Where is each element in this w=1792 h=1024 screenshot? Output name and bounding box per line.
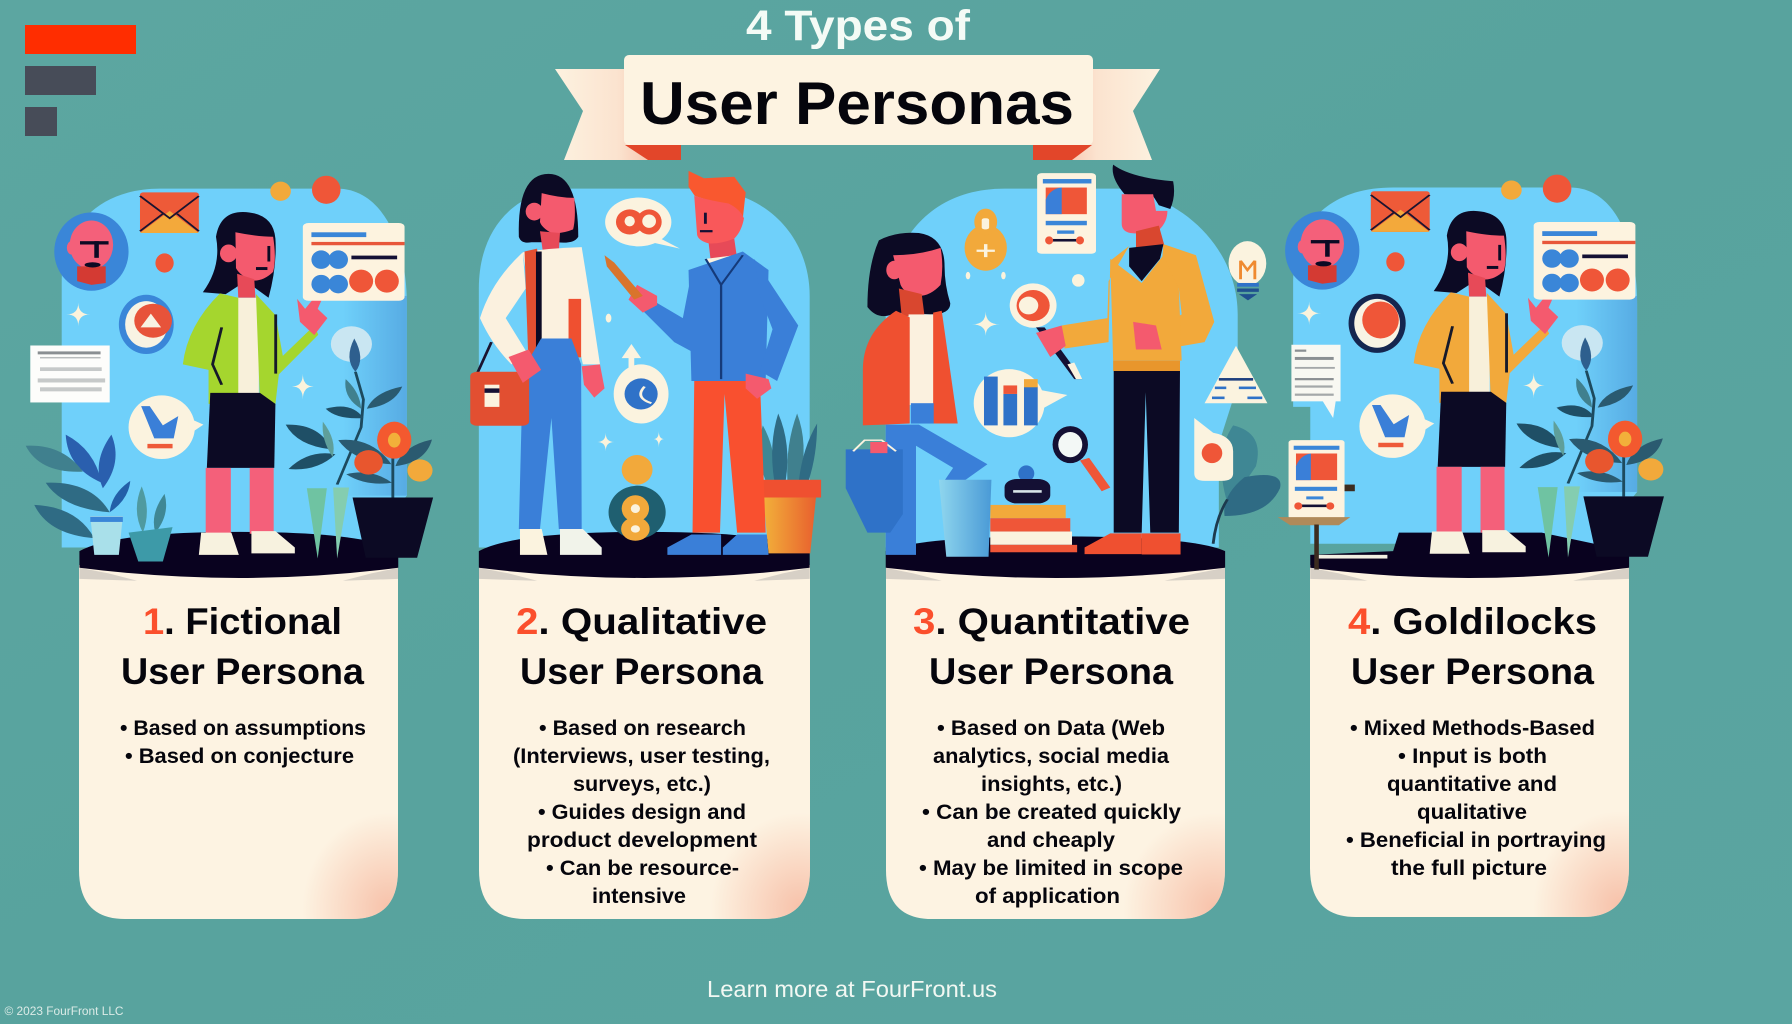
data note bubble xyxy=(1291,345,1341,418)
UI card xyxy=(303,223,405,301)
platform xyxy=(479,532,810,578)
stacked balls icon xyxy=(609,455,666,541)
UI card xyxy=(1534,222,1635,300)
card 4 bullets: • Beneficial in portraying xyxy=(1346,829,1606,852)
document card on table xyxy=(1278,440,1387,570)
ribbon left fold xyxy=(625,145,681,160)
card 2 bullets xyxy=(513,717,770,908)
speech bubble with check xyxy=(1359,394,1434,458)
card 3 illustration xyxy=(846,165,1280,581)
stipple corners xyxy=(479,568,810,581)
card 2 bullets: product development xyxy=(527,829,757,852)
card 2 bullets: • Based on research xyxy=(539,717,746,740)
card 3 bullets: • May be limited in scope xyxy=(919,857,1183,880)
card 3 text panel xyxy=(886,565,1225,919)
card 3 bullets xyxy=(919,717,1183,908)
icon: sparkles xyxy=(66,303,314,399)
copyright: © 2023 FourFront LLC xyxy=(4,1004,124,1018)
panel: card 2 Qualitative xyxy=(470,171,821,919)
book stack xyxy=(990,505,1077,552)
card 2 bullets: surveys, etc.) xyxy=(573,773,711,796)
arrow clock icon xyxy=(614,344,669,424)
card 1 bullets xyxy=(120,717,366,768)
card 3 bullets: analytics, social media xyxy=(933,745,1169,768)
card 1 bullets: • Based on conjecture xyxy=(125,745,354,768)
card 3 bullets: of application xyxy=(975,885,1120,908)
amber bubble plus xyxy=(965,209,1007,271)
panel: card 1 Fictional xyxy=(26,176,433,919)
card 2 bullets: (Interviews, user testing, xyxy=(513,745,770,768)
card 4 bullets xyxy=(1346,717,1606,880)
card 2 heading: 2. Qualitative xyxy=(516,601,767,642)
ribbon right tail xyxy=(1033,69,1160,160)
side plant xyxy=(1213,425,1280,544)
card 2 bullets: • Can be resource- xyxy=(546,857,739,880)
card 4 bullets: quantitative and xyxy=(1387,773,1557,796)
card 4 bullets: • Input is both xyxy=(1398,745,1547,768)
card 3 heading: 3. Quantitative xyxy=(913,601,1190,642)
left potted plant xyxy=(26,435,130,555)
sparkles xyxy=(966,272,1085,336)
platform xyxy=(79,532,398,578)
card 4 heading: 4. Goldilocks xyxy=(1348,601,1597,642)
ink bottle xyxy=(1005,465,1050,503)
bar chart bubble xyxy=(974,369,1067,437)
card 3 bullets: insights, etc.) xyxy=(981,773,1122,796)
speech bubble with check xyxy=(129,395,203,459)
card 1 illustration xyxy=(26,176,433,581)
note with red dot xyxy=(1194,418,1233,481)
right flowering plant and pot xyxy=(286,326,433,559)
stipple corners xyxy=(886,568,1225,581)
banner plate xyxy=(624,55,1093,145)
card 4 bullets: qualitative xyxy=(1417,801,1527,824)
card 2 bullets: • Guides design and xyxy=(538,801,746,824)
magnifier target xyxy=(1010,283,1082,379)
title banner xyxy=(555,55,1160,160)
decorative dots xyxy=(155,176,341,273)
icon: avatar xyxy=(54,212,129,291)
speech bubble infinity xyxy=(605,198,680,249)
decorative dots xyxy=(1386,175,1571,272)
panel: card 3 Quantitative: User Persona xyxy=(929,651,1173,692)
panel: card 2 Qualitative: User Persona xyxy=(520,651,763,692)
person: woman with basket xyxy=(846,233,987,555)
logo xyxy=(25,25,136,136)
platform xyxy=(1310,533,1629,578)
card 1 heading: 1. Fictional xyxy=(143,601,342,642)
pyramid xyxy=(1205,346,1267,403)
panel: card 1 Fictional: User Persona xyxy=(121,651,364,692)
person: man in amber jacket xyxy=(1036,165,1214,554)
card 4 illustration xyxy=(1278,175,1664,581)
magnifying glass xyxy=(1053,426,1110,491)
footer link text: Learn more at FourFront.us xyxy=(707,976,997,1002)
ribbon right fold xyxy=(1033,145,1092,160)
person: woman in amber cardigan xyxy=(1414,211,1558,554)
person: man in blue sweater xyxy=(605,171,798,555)
icon: avatar xyxy=(1285,211,1359,290)
icon: sparkles xyxy=(1297,301,1545,398)
card 3 bullets: • Can be created quickly xyxy=(922,801,1181,824)
card 3 bullets: and cheaply xyxy=(987,829,1115,852)
card 4 bullets: the full picture xyxy=(1391,857,1547,880)
card 4 text panel xyxy=(1310,565,1629,917)
icon: dark ring chart xyxy=(1349,294,1406,353)
light bulb xyxy=(1229,241,1266,300)
potted plant xyxy=(754,414,821,553)
card 2 bullets: intensive xyxy=(592,885,686,908)
document note xyxy=(30,345,110,402)
panel: card 4 Goldilocks xyxy=(1278,175,1664,917)
icon: target ring xyxy=(119,295,174,354)
ribbon left tail xyxy=(555,69,681,160)
icon: envelope xyxy=(140,192,199,233)
card 4 bullets: • Mixed Methods-Based xyxy=(1350,717,1595,740)
mug xyxy=(939,480,991,557)
banner heading: User Personas xyxy=(640,70,1074,137)
panel: card 4 Goldilocks: User Persona xyxy=(1351,651,1594,692)
person: woman in lime cardigan xyxy=(183,212,327,555)
stipple corners xyxy=(1310,568,1629,581)
card 3 bullets: • Based on Data (Web xyxy=(937,717,1165,740)
panel: card 3 Quantitative xyxy=(846,165,1280,919)
right flowering plant and pot xyxy=(1517,325,1664,557)
card 2 illustration xyxy=(470,171,821,581)
person: woman with bag xyxy=(470,174,605,555)
stipple corners xyxy=(79,568,398,581)
document card xyxy=(1037,173,1096,254)
title line: 4 Types of: 4 Types of xyxy=(746,2,971,50)
small plant xyxy=(129,486,173,562)
card 1 bullets: • Based on assumptions xyxy=(120,717,366,740)
card 1 text panel xyxy=(79,565,398,919)
icon: envelope xyxy=(1371,191,1430,232)
card 2 text panel xyxy=(479,565,810,919)
sparkles xyxy=(597,314,664,451)
platform xyxy=(886,536,1225,578)
